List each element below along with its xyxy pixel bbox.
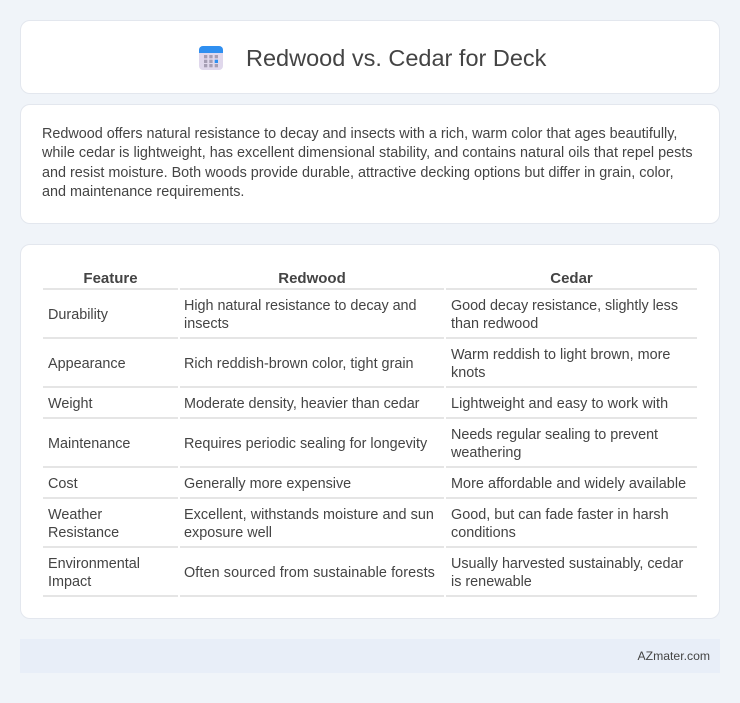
footer attribution: AZmater.com — [638, 649, 710, 663]
panel: summary text card — [20, 104, 720, 224]
row: maintenance: Requires periodic sealing for longevity — [184, 436, 427, 452]
table header row: Cedar — [550, 270, 593, 287]
row: appearance: Rich reddish-brown color, tight grain — [184, 356, 414, 372]
row: appearance: Appearance — [48, 356, 126, 372]
footer bar — [20, 639, 720, 673]
summary text: and maintenance requirements. — [42, 184, 244, 200]
summary text: Redwood offers natural resistance to decay and insects with a rich, warm color that ages beautifully, — [42, 126, 677, 142]
row: maintenance: weathering — [451, 445, 521, 461]
summary text: and resist moisture. Both woods provide durable, attractive decking options but differ in grain, color, — [42, 165, 674, 181]
row: maintenance — [48, 427, 658, 461]
panel: title card — [20, 20, 720, 94]
row: durability: High natural resistance to decay and — [184, 298, 417, 314]
table header row — [83, 270, 593, 287]
row: weight: Lightweight and easy to work with — [451, 396, 668, 412]
row: environmental impact: Impact — [48, 574, 91, 590]
comparison table — [43, 270, 697, 597]
table header row: Feature — [83, 270, 138, 287]
row: durability: insects — [184, 316, 229, 332]
row: durability — [48, 298, 678, 332]
row: environmental impact: is renewable — [451, 574, 532, 590]
row: weight: Weight — [48, 396, 93, 412]
row: cost: Cost — [48, 476, 78, 492]
row: appearance: knots — [451, 365, 485, 381]
row: environmental impact: Often sourced from sustainable forests — [184, 565, 435, 581]
row: weather resistance: conditions — [451, 525, 516, 541]
row: appearance: Warm reddish to light brown, more — [451, 347, 670, 363]
row: weather resistance: Excellent, withstands moisture and sun — [184, 507, 434, 523]
row: weather resistance: Good, but can fade faster in harsh — [451, 507, 669, 523]
row: durability: Durability — [48, 307, 108, 323]
icon: calendar — [199, 46, 223, 70]
row: cost: More affordable and widely available — [451, 476, 686, 492]
summary text: while cedar is lightweight, has excellent dimensional stability, and contains natural oils that repel pests — [42, 145, 693, 161]
panel: comparison table card — [20, 244, 720, 619]
row: weather resistance: Resistance — [48, 525, 119, 541]
row: appearance — [48, 347, 670, 381]
row: weather resistance: exposure well — [184, 525, 272, 541]
table header row: Redwood — [278, 270, 346, 287]
row: environmental impact — [48, 556, 684, 590]
row: weather resistance — [48, 507, 669, 541]
row: environmental impact: Environmental — [48, 556, 140, 572]
row: durability: Good decay resistance, slightly less — [451, 298, 678, 314]
row: weight — [48, 396, 668, 412]
row: environmental impact: Usually harvested sustainably, cedar — [451, 556, 683, 572]
row: durability: than redwood — [451, 316, 538, 332]
title: Redwood vs. Cedar for Deck — [246, 45, 546, 71]
row: weather resistance: Weather — [48, 507, 102, 523]
row: weight: Moderate density, heavier than cedar — [184, 396, 419, 412]
row: maintenance: Maintenance — [48, 436, 130, 452]
summary text — [42, 126, 693, 200]
row: cost: Generally more expensive — [184, 476, 351, 492]
row: maintenance: Needs regular sealing to prevent — [451, 427, 658, 443]
row: cost — [48, 476, 686, 492]
